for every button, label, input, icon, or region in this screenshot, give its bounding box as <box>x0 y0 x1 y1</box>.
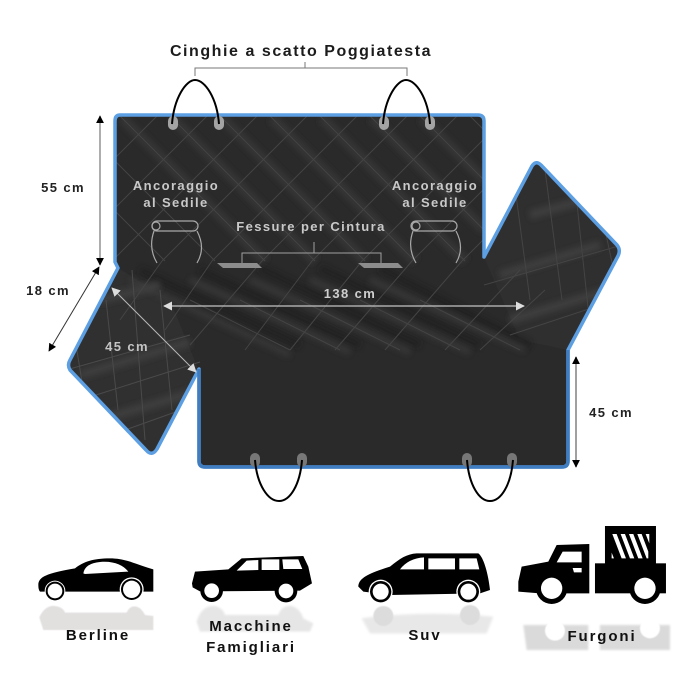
dimension: 138 cm: 138 cm <box>324 286 376 301</box>
icon: belt slots <box>217 242 403 268</box>
label: Berline: Berline <box>66 627 130 644</box>
bottom left strap <box>250 453 307 501</box>
vehicle: sedan <box>37 558 153 630</box>
label: Suv: Suv <box>408 627 442 644</box>
dimension: flap 45 cm <box>105 288 196 372</box>
right flap quilt <box>484 245 622 335</box>
label: family cars: Famigliari <box>206 639 296 656</box>
dimension: right 45 cm: 45 cm <box>589 405 633 420</box>
label: anchor right: al Sedile <box>402 195 468 210</box>
title bracket <box>195 62 407 76</box>
vehicle: truck <box>518 526 677 650</box>
label: belt slots: Fessure per Cintura <box>236 219 386 234</box>
flap shading <box>484 160 622 350</box>
label: anchor left: Ancoraggio <box>133 178 219 193</box>
left flap quilt <box>66 335 200 430</box>
label: anchor left: al Sedile <box>143 195 209 210</box>
seat bottom edge <box>199 350 568 467</box>
top right strap <box>379 80 435 130</box>
panel: seat cover <box>66 111 622 467</box>
dimension: 55 cm: 55 cm <box>41 180 85 195</box>
top left strap <box>168 80 224 130</box>
title: Cinghie a scatto Poggiatesta <box>170 43 432 60</box>
vehicle: suv <box>347 553 493 633</box>
label: family cars: Macchine <box>209 618 293 635</box>
icon: anchor right <box>411 221 460 263</box>
soft quilt shading <box>122 118 484 261</box>
bottom right strap <box>462 453 517 501</box>
middle quilt <box>120 261 545 350</box>
dimension: 18 cm: 18 cm <box>26 283 70 298</box>
icon: anchor left <box>152 221 202 263</box>
upper quilt <box>115 111 484 261</box>
dimension: right 45 cm <box>576 357 633 467</box>
vehicle: family car <box>167 556 313 632</box>
dimension: 18 cm <box>26 267 99 351</box>
label: anchor right: Ancoraggio <box>392 178 478 193</box>
label: Furgoni: Furgoni <box>567 628 637 645</box>
dimension: flap 45 cm: 45 cm <box>105 339 149 354</box>
